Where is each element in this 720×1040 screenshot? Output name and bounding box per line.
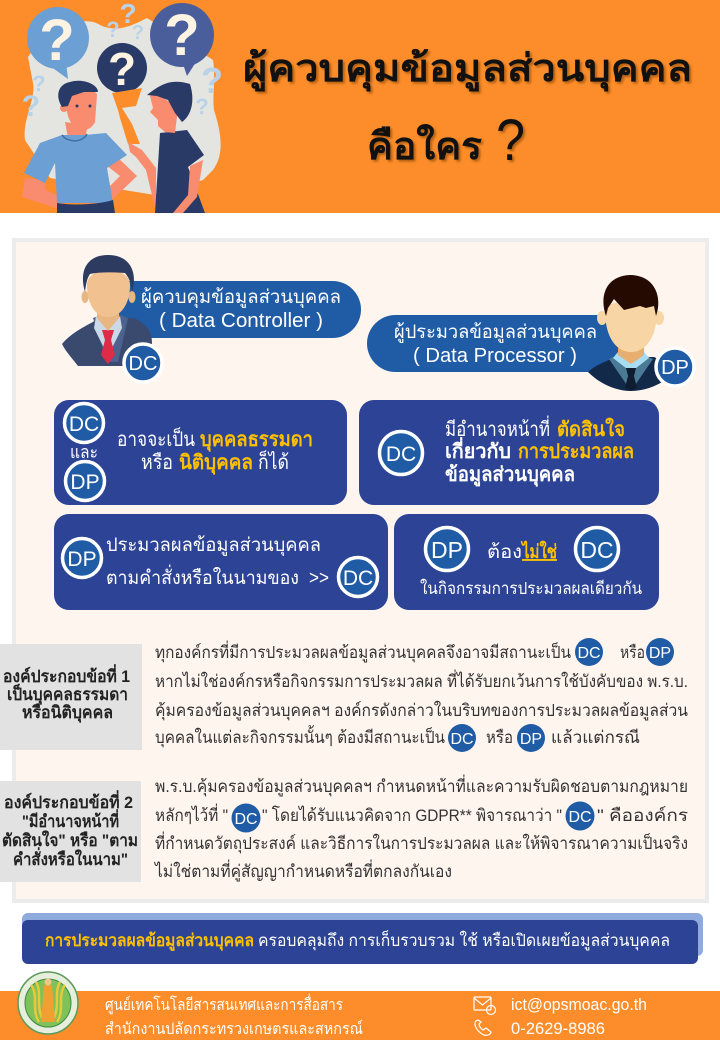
data processor bubble: ผู้ประมวลข้อมูลส่วนบุคคล <box>394 322 597 344</box>
right man <box>128 82 205 213</box>
label: element 2: องค์ประกอบข้อที่ 2 <box>4 790 133 812</box>
main panel <box>12 238 709 903</box>
same activity text: ในกิจกรรมการประมวลผลเดียวกัน <box>420 578 642 598</box>
zigzag crack <box>112 88 142 144</box>
left man <box>22 81 137 213</box>
must not text: ไม่ใช่ <box>520 540 557 563</box>
header band <box>0 0 720 213</box>
label: element 2 <box>0 781 141 882</box>
text: ประมวลผลข้อมูลส่วนบุคคล <box>106 535 321 557</box>
title: ? <box>496 108 525 173</box>
badge: DP <box>66 462 104 500</box>
text <box>117 426 313 475</box>
icon: phone <box>475 1020 491 1035</box>
text: บุคคลธรรมดา <box>200 429 313 452</box>
data processor bubble: ( Data Processor ) <box>413 345 577 367</box>
question marks: ? <box>32 71 46 96</box>
badge: DP <box>426 528 468 570</box>
badge: DP: DP <box>70 471 100 494</box>
title: ผู้ควบคุมข้อมูลส่วนบุคคล <box>243 48 692 92</box>
text block: element 2: พ.ร.บ.คุ้มครองข้อมูลส่วนบุคคลฯ กำหนดหน้าที่และความรับผิดชอบตามกฎหมาย <box>155 774 688 797</box>
icon: email <box>474 997 496 1014</box>
question marks: ? <box>195 94 209 119</box>
icon: data controller person <box>62 255 152 366</box>
text <box>106 535 329 589</box>
text block: element 1: หรือ <box>486 728 513 747</box>
phone number: 0-2629-8986 <box>511 1019 605 1038</box>
data controller bubble: ( Data Controller ) <box>159 310 323 332</box>
label: element 1 <box>0 644 142 750</box>
panel: DC and DP may be natural or legal persons <box>54 400 347 505</box>
and label: และ <box>70 442 98 462</box>
text: หรือ <box>141 452 173 474</box>
badge: DC: DC <box>129 353 157 375</box>
text block: element 2: ไม่ใช่ตามที่คู่สัญญากำหนดหรือที่ตกลงกันเอง <box>153 859 452 882</box>
question marks: ? <box>108 43 136 95</box>
text block: element 2: " คือองค์กร <box>597 806 688 825</box>
question marks: ? <box>201 60 223 101</box>
badge: DP: DP <box>661 357 689 379</box>
text: ข้อมูลส่วนบุคคล <box>445 463 575 488</box>
text: ตามคำสั่งหรือในนามของ <box>106 564 299 589</box>
speech bubbles <box>27 3 214 101</box>
footer organisation text: สำนักงานปลัดกระทรวงเกษตรและสหกรณ์ <box>105 1019 363 1038</box>
text: การประมวลผล <box>518 441 634 463</box>
text block: element 2: หลักๆไว้ที่ " <box>155 803 228 825</box>
question marks: ? <box>22 90 40 123</box>
question marks: ? <box>164 3 200 68</box>
backdrop blob <box>25 18 221 195</box>
icon: data processor person <box>588 275 674 391</box>
badge: DC <box>124 344 162 382</box>
panel: DP processes on behalf of DC <box>54 514 388 610</box>
data controller bubble <box>100 281 361 338</box>
inline badges: DC <box>234 811 258 828</box>
badge: DC: DC <box>69 413 99 436</box>
label: element 1: องค์ประกอบข้อที่ 1 <box>3 664 130 686</box>
badge: DC <box>380 432 422 474</box>
text block: element 1: ทุกองค์กรที่มีการประมวลผลข้อมูลส่วนบุคคลจึงอาจมีสถานะเป็น <box>155 640 571 663</box>
badge: DP <box>656 348 694 386</box>
badge: DP: DP <box>431 537 463 563</box>
text block: element 1: หรือ <box>620 643 645 662</box>
title <box>243 48 692 173</box>
text: นิติบุคคล <box>179 452 253 475</box>
badge: DC: DC <box>386 443 416 466</box>
badge: DC <box>64 404 104 442</box>
inline badges: DC <box>450 731 474 748</box>
badge: DC: DC <box>580 537 614 563</box>
illustration: two men with question bubbles <box>22 0 223 213</box>
label: element 2: คำสั่งหรือในนาม" <box>13 847 128 869</box>
question marks: ? <box>106 17 120 42</box>
banner: definition of processing <box>22 913 703 964</box>
badge: DC <box>338 558 378 596</box>
inline badges: DP <box>520 731 542 748</box>
text block: element 1: แล้วแต่กรณี <box>551 728 640 747</box>
footer organisation text <box>105 993 363 1038</box>
text: >> <box>309 568 329 589</box>
text: ตัดสินใจ <box>557 417 625 441</box>
text block: element 1 <box>155 638 688 752</box>
label: element 2: "มีอำนาจหน้าที่ <box>22 809 119 831</box>
inline badges <box>448 638 674 752</box>
question marks <box>22 0 223 123</box>
inline badges: DC <box>568 809 592 826</box>
inline badges <box>232 802 594 832</box>
text: มีอำนาจหน้าที่ <box>445 415 550 441</box>
text block: element 2 <box>153 774 688 882</box>
badge: DP: DP <box>67 548 97 571</box>
banner: definition of processing: การประมวลผลข้อมูลส่วนบุคคล <box>45 931 254 952</box>
banner: definition of processing: ครอบคลุมถึง การเก็บรวบรวม ใช้ หรือเปิดเผยข้อมูลส่วนบุคคล <box>258 929 670 951</box>
text <box>445 415 634 488</box>
data controller bubble: ผู้ควบคุมข้อมูลส่วนบุคคล <box>141 287 341 309</box>
text block: element 1: คุ้มครองข้อมูลส่วนบุคคลฯ องค์กรดังกล่าวในบริบทของการประมวลผลข้อมูลส่วน <box>155 700 688 721</box>
logo <box>18 972 78 1034</box>
text: อาจจะเป็น <box>117 426 195 451</box>
badge: DP <box>62 538 102 578</box>
must not text <box>487 540 557 563</box>
label: element 2: ตัดสินใจ" หรือ "ตาม <box>2 830 138 850</box>
panel: DP must not be DC in the same activity <box>394 514 659 610</box>
question marks: ? <box>132 22 144 44</box>
email address: ict@opsmoac.go.th <box>511 995 647 1014</box>
label: element 1: เป็นบุคคลธรรมดา <box>7 682 128 705</box>
inline badges: DC <box>577 645 601 662</box>
text block: element 1: บุคคลในแต่ละกิจกรรมนั้นๆ ต้องมีสถานะเป็น <box>155 725 445 748</box>
footer organisation text: ศูนย์เทคโนโลยีสารสนเทศและการสื่อสาร <box>105 993 343 1015</box>
question marks: ? <box>39 8 75 73</box>
must not text: ต้อง <box>487 542 522 563</box>
text block: element 2: " โดยได้รับแนวคิดจาก GDPR** พิจารณาว่า " <box>262 805 562 825</box>
inline badges: DP <box>649 645 671 662</box>
title: คือใคร <box>367 124 483 168</box>
footer band <box>0 991 720 1040</box>
text: เกี่ยวกับ <box>445 436 511 463</box>
label: element 1: หรือนิติบุคคล <box>22 702 113 723</box>
text: ก็ได้ <box>258 449 289 474</box>
data processor bubble <box>367 315 637 372</box>
panel: DC has decision authority <box>359 400 659 505</box>
badge: DC <box>576 528 618 570</box>
badge: DC: DC <box>343 567 373 590</box>
